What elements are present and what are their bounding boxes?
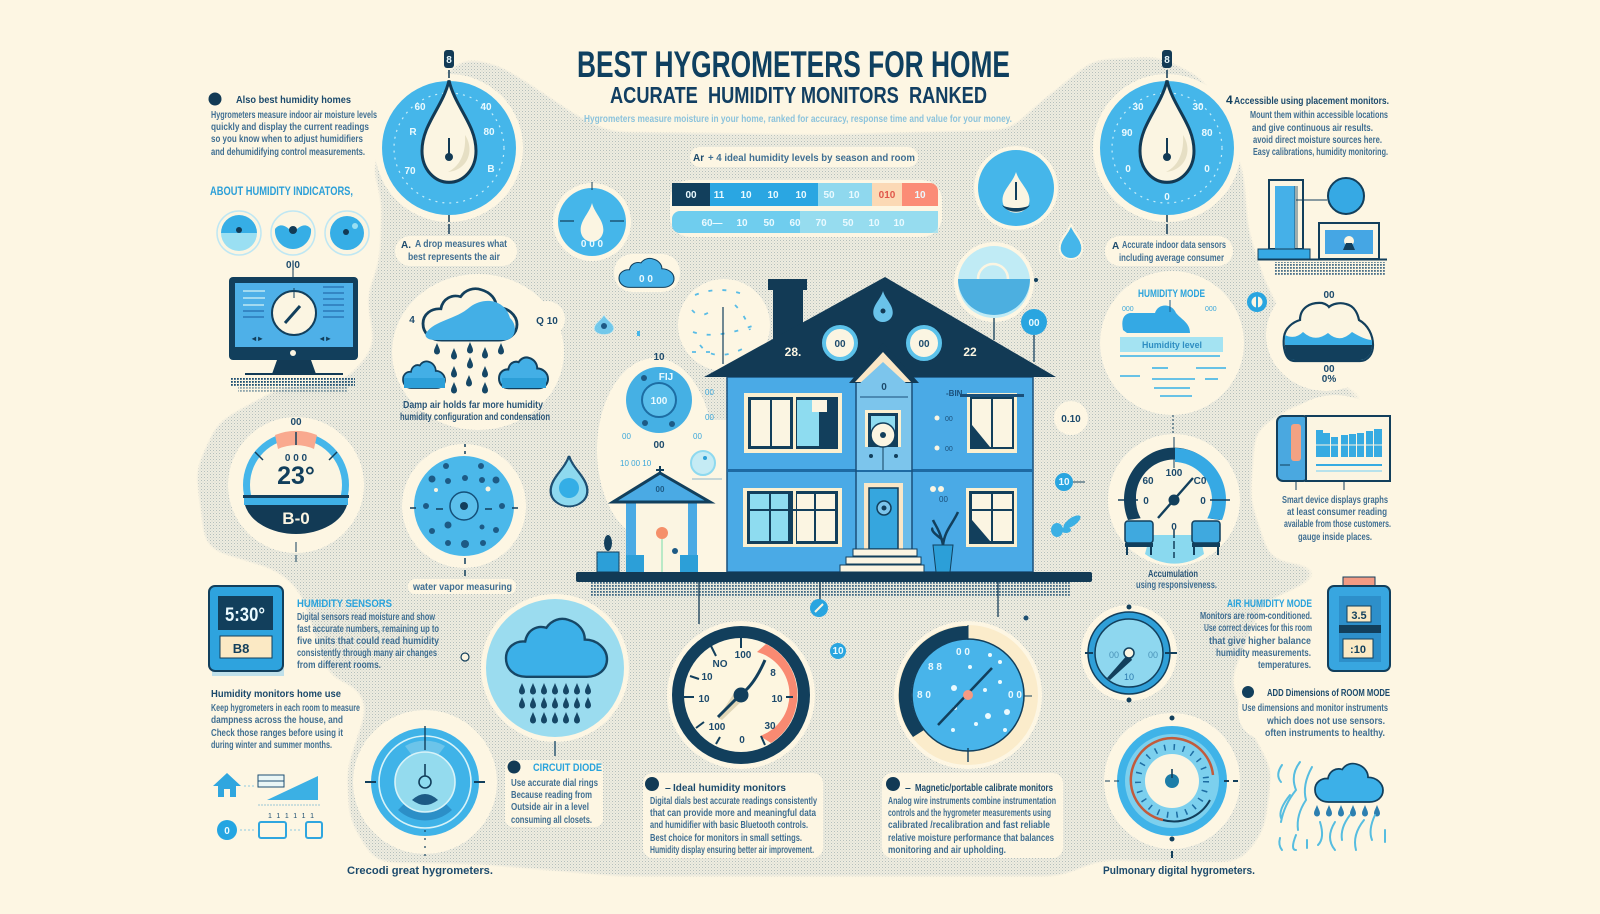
small cloud tag — [619, 258, 674, 287]
icon: cream cloud right: 0% — [1322, 374, 1336, 385]
humidity scale chart: 50 — [823, 190, 835, 201]
text box: monitor center right: Magnetic/portable calibrate monitors — [915, 782, 1053, 794]
text: humidity monitors: dampness across the house, and — [211, 715, 343, 726]
text: top right: 4 — [1226, 93, 1233, 107]
humidity scale chart: 60 — [789, 218, 801, 229]
bar device — [1277, 416, 1390, 490]
house: door — [864, 483, 903, 549]
badge: right — [1247, 292, 1267, 312]
humidity scale chart — [672, 153, 938, 233]
analog gauge center: 8 — [770, 668, 776, 679]
text: top right: Mount them within accessible locations — [1250, 110, 1388, 121]
small cloud tag: 0 0 — [639, 274, 653, 285]
small drop dial: 0 0 0 — [581, 239, 604, 250]
text box: monitor center right — [886, 777, 1056, 856]
small light gauge: 00 — [1109, 650, 1119, 660]
text box: bullet 0: Use accurate dial rings — [511, 778, 598, 789]
caption: dotted dial: water vapor measuring — [412, 582, 512, 593]
humidity scale chart: 10 — [868, 218, 880, 229]
small dial left of house — [620, 352, 714, 468]
droplet dial center right: 8 0 — [917, 690, 931, 701]
left gauge: 23° — [277, 462, 315, 490]
house: gable: 0 — [881, 382, 887, 393]
house: roof — [704, 277, 1056, 377]
text box: monitor center right: Analog wire instruments combine instrumentation — [888, 796, 1056, 807]
small dial left of house: 00 — [622, 432, 631, 441]
icons: home chart flow — [213, 773, 322, 840]
caption: gauge: Accumulation — [1148, 569, 1198, 580]
big drop dial right: 8 — [1164, 55, 1170, 66]
text: air humidity mode — [1200, 598, 1312, 671]
house: roof: 28. — [785, 345, 801, 359]
gauge with chairs — [1118, 437, 1230, 564]
cream bubbles behind elements — [228, 74, 1410, 858]
icon: small drop near right dial — [1060, 224, 1082, 259]
text box: monitor center right: relative moisture performance that balances — [888, 833, 1054, 844]
icon: big drop dial left: 70 — [404, 166, 416, 177]
text: humidity sensors: consistently through many air changes — [297, 648, 437, 659]
badge: numeric: 10 — [832, 646, 844, 657]
analog gauge center: 100 — [709, 722, 726, 733]
humidity scale chart: 11 — [714, 190, 725, 201]
badge: side label: 10 — [1058, 477, 1070, 488]
humidity scale chart: 50 — [842, 218, 854, 229]
icon: cream cloud right: 00 — [1323, 290, 1335, 301]
text: air humidity mode: Use correct devices for this room — [1204, 623, 1312, 634]
house: roof: 22 — [963, 345, 977, 359]
icons: home chart flow: 0 — [224, 826, 230, 837]
small dial left of house: 100 — [651, 396, 668, 407]
caption: right dial — [1112, 240, 1226, 264]
caption: left dial: A. — [401, 240, 411, 251]
device: digital hygrometer right: 3.5 — [1351, 610, 1367, 622]
text: top right: Easy calibrations, humidity monitoring. — [1253, 147, 1388, 158]
house: gable dial — [865, 410, 901, 470]
icon: cream cloud right — [1284, 290, 1373, 385]
analog gauge center: NO — [712, 659, 728, 670]
text box: monitor center right: monitoring and air upholding. — [888, 845, 1006, 856]
humidity scale chart: 60— — [701, 218, 723, 229]
text: air humidity mode: Monitors are room-conditioned. — [1200, 611, 1312, 622]
caption: right dial: including average consumer — [1119, 253, 1224, 264]
small drop right — [978, 150, 1054, 226]
icon: big drop dial left: R — [409, 127, 417, 138]
caption: bottom left: Crecodi great hygrometers. — [347, 865, 493, 877]
humidity scale chart: 70 — [815, 218, 827, 229]
badges center — [810, 599, 828, 617]
panel: top left text: and dehumidifying control measurements. — [211, 147, 365, 158]
analog gauge center: 10 — [771, 694, 783, 705]
text: humidity monitors: during winter and summer months. — [211, 740, 332, 751]
left gauge: 00 — [290, 417, 302, 428]
house: walls — [727, 377, 1033, 572]
bottom right dial — [1105, 716, 1240, 858]
house: wall labels — [930, 389, 963, 504]
icon: big drop dial left: B — [487, 164, 495, 175]
speckled backdrop — [197, 57, 1358, 877]
caption: left dial — [401, 239, 508, 263]
label: Q 10: 0.10 — [1061, 414, 1081, 425]
gauge with chairs: 0 — [1143, 496, 1149, 507]
house: roof: 00 — [918, 339, 930, 350]
icon: big drop dial left — [382, 50, 516, 234]
text: bullet right: Use dimensions and monitor instruments — [1242, 703, 1388, 714]
caption: bar device: available from those customers. — [1284, 519, 1391, 530]
icon: cloud with wind — [1278, 762, 1385, 850]
text: humidity sensors: Digital sensors read moisture and show — [297, 612, 435, 623]
left gauge: 0 0 0 — [285, 453, 308, 464]
text: air humidity mode: temperatures. — [1258, 660, 1311, 671]
analog gauge center: 10 — [701, 672, 713, 683]
icon: dot — [1024, 616, 1028, 620]
text: humidity monitors: Check those ranges before using it — [211, 728, 344, 739]
panel: top left text — [208, 92, 377, 158]
text: top right — [1226, 93, 1389, 158]
house — [576, 277, 1092, 624]
icons: three humidity indicators — [217, 211, 369, 271]
title — [577, 44, 1012, 125]
text box: monitor center right: controls and the hygrometer measurements using — [888, 808, 1051, 819]
text: humidity sensors: HUMIDITY SENSORS — [297, 598, 392, 610]
text: top right: avoid direct moisture sources here. — [1253, 135, 1382, 146]
text box: bullet 0 — [508, 760, 602, 826]
caption: right dial: A — [1112, 241, 1119, 252]
droplet dial center right: 8 8 — [928, 662, 942, 673]
house: chimney — [768, 279, 807, 339]
icon: monitor with dial: ◂ ▸ — [251, 334, 263, 343]
small dial left of house: 10 — [653, 352, 665, 363]
text box: monitor center right: – — [905, 782, 911, 794]
device: digital hygrometer right — [1328, 577, 1390, 671]
analog gauge center: 100 — [735, 650, 752, 661]
subtitle: ACURATE HUMIDITY MONITORS RANKED — [610, 82, 987, 108]
text: bullet right: often instruments to healthy. — [1265, 728, 1385, 739]
caption: bar device: Smart device displays graphs — [1282, 495, 1388, 506]
caption: left dial: best represents the air — [408, 252, 500, 263]
text box: humidity monitors center: Ideal humidity monitors — [673, 782, 786, 794]
gauge with chairs: 60 — [1142, 476, 1154, 487]
rain cloud disc — [486, 599, 624, 756]
text: humidity sensors — [297, 598, 439, 671]
analog gauge center: 30 — [764, 721, 776, 732]
dashed data bubble — [692, 290, 755, 364]
icon: big drop dial left: 8 — [446, 55, 452, 66]
caption: bottom right: Pulmonary digital hygrometers. — [1103, 865, 1255, 877]
caption: right dial: Accurate indoor data sensors — [1122, 240, 1226, 251]
humidity scale chart: 10 — [893, 218, 905, 229]
left gauge: B-0 — [282, 509, 310, 528]
humidity scale chart: 10 — [740, 190, 752, 201]
house: small porch: 00 — [656, 485, 665, 494]
text: bullet right: ADD Dimensions of ROOM MODE — [1267, 687, 1390, 699]
icon: cream cloud right: 00 — [1323, 364, 1335, 375]
droplet dial center right — [898, 625, 1038, 765]
big drop dial right: 0 — [1164, 192, 1170, 203]
humidity scale chart: 00 — [685, 190, 697, 201]
intro line: Hygrometers measure moisture in your home, ranked for accuracy, response time and value for your money. — [584, 114, 1012, 125]
house: steps — [840, 549, 924, 572]
house: ground — [576, 572, 1092, 624]
caption: cloud: Damp air holds far more humidity — [403, 400, 543, 411]
icon: big drop — [551, 456, 587, 506]
icon: small circle — [461, 653, 469, 661]
big drop dial right: 30 — [1192, 102, 1204, 113]
text: humidity sensors: fast accurate numbers, remaining up to — [297, 624, 439, 635]
dotted disc dial — [410, 444, 518, 576]
analog gauge center: 0 — [739, 735, 745, 746]
icons: home chart flow: 1 1 1 1 1 1 — [268, 813, 314, 820]
device: digital hygrometer left: 5:30° — [225, 605, 265, 626]
text box: humidity monitors center: that can provide more and meaningful data — [650, 808, 816, 819]
droplet dial center right: 0 0 — [1008, 690, 1022, 701]
house: wall labels: 00 — [945, 446, 953, 453]
icons: three humidity indicators: 0|0 — [286, 260, 300, 271]
icon: cloud with rain — [403, 289, 548, 394]
small dial left of house: 00 — [705, 413, 714, 422]
badge: 0 0: 00 — [1028, 318, 1040, 329]
analog gauge center: 10 — [698, 694, 710, 705]
title: BEST HYGROMETERS FOR HOME — [577, 44, 1010, 85]
text box: humidity monitors center: Digital dials best accurate readings consistently — [650, 796, 817, 807]
analog gauge center — [672, 626, 810, 764]
caption: cloud — [400, 316, 558, 423]
badge: side label — [1055, 473, 1085, 491]
text: top right: and give continuous air results. — [1252, 123, 1373, 134]
humidity scale chart: 10 — [795, 190, 807, 201]
panel: top left text: so you know when to adjust humidifiers — [211, 134, 363, 145]
gauge with chairs: 0 — [1171, 522, 1177, 533]
left gauge — [241, 417, 351, 562]
panel: top left text: Also best humidity homes — [236, 94, 351, 106]
humidity scale chart: 10 — [848, 190, 860, 201]
icon: big drop dial left: 80 — [483, 127, 495, 138]
device: digital hygrometer left: B8 — [233, 641, 249, 656]
badge: 0 0 — [1021, 309, 1047, 362]
panel: top left text: quickly and display the current readings — [211, 122, 369, 133]
text: humidity monitors: Keep hygrometers in each room to measure — [211, 703, 360, 714]
humidity scale chart: 10 — [736, 218, 748, 229]
text: top right: Accessible using placement monitors. — [1234, 95, 1389, 107]
house: wall labels: 00 — [939, 495, 948, 504]
small dial left of house: 00 — [653, 440, 665, 451]
device: digital hygrometer right: :10 — [1350, 644, 1366, 656]
badge: numeric — [830, 643, 846, 659]
text box: bullet 0: consuming all closets. — [511, 815, 592, 826]
house: lower left window — [743, 488, 842, 547]
text box: bullet 0: Because reading from — [511, 790, 592, 801]
big drop dial right: 80 — [1201, 128, 1213, 139]
text: air humidity mode: that give higher balance — [1209, 636, 1311, 647]
humidity bubble panel: HUMIDITY MODE — [1138, 288, 1205, 300]
small dial left of house: FIJ — [659, 372, 673, 383]
panel: top left text: Hygrometers measure indoor air moisture levels — [211, 110, 377, 121]
text box: humidity monitors center: Humidity display ensuring better air improvement. — [650, 845, 814, 856]
text box: humidity monitors center — [645, 777, 817, 856]
humidity scale chart: 10 — [914, 190, 926, 201]
icon: small gauge bubble — [691, 451, 722, 479]
text: humidity monitors — [211, 688, 360, 751]
bottom left dial — [365, 726, 485, 858]
small light gauge — [1085, 604, 1177, 702]
device: digital hygrometer left — [209, 586, 284, 676]
house: wall labels: 00 — [945, 416, 953, 423]
caption: cloud: Q 10 — [536, 316, 558, 327]
text box: humidity monitors center: and humidifier with basic Bluetooth controls. — [650, 820, 808, 831]
icon: monitor with dial: ◂ ▸ — [319, 334, 331, 343]
sky globe top right of house — [958, 246, 1038, 340]
small drop tag — [594, 315, 640, 336]
text: air humidity mode: humidity measurements. — [1216, 648, 1311, 659]
text: bullet right — [1242, 686, 1390, 739]
small dial left of house: 00 — [705, 388, 714, 397]
caption: gauge — [1136, 569, 1217, 591]
big drop dial right: 0 — [1125, 164, 1131, 175]
gauge with chairs: 0 — [1200, 496, 1206, 507]
text: humidity monitors: Humidity monitors home use — [211, 688, 341, 700]
text box: humidity monitors center: – — [665, 782, 671, 794]
gauge with chairs: 100 — [1166, 468, 1183, 479]
icon: big drop dial left: 40 — [480, 102, 492, 113]
text box: humidity monitors center: Best choice for monitors in small settings. — [650, 833, 802, 844]
heading: about humidity indicators: ABOUT HUMIDITY INDICATORS, — [210, 186, 353, 198]
house: roof: 00 — [834, 339, 846, 350]
text box: monitor center right: calibrated /recalibration and fast reliable — [888, 820, 1050, 831]
small light gauge: 00 — [1148, 650, 1158, 660]
house: plant — [932, 512, 958, 572]
caption: bar device: gauge inside places. — [1298, 532, 1372, 543]
droplet dial center right: 0 0 — [956, 647, 970, 658]
house: small porch — [597, 466, 710, 572]
house: wall labels: -BIN — [946, 389, 963, 398]
small dial left of house: 10 00 10 — [620, 459, 652, 468]
icon: cloud with rain: 4 — [409, 315, 415, 326]
text: air humidity mode: AIR HUMIDITY MODE — [1227, 598, 1312, 610]
humidity scale chart: 10 — [767, 190, 779, 201]
humidity bubble panel: 000 — [1122, 306, 1134, 313]
big drop dial right: 0 — [1204, 164, 1210, 175]
house: lower right window — [966, 488, 1017, 547]
caption: bar device: at least consumer reading — [1287, 507, 1387, 518]
humidity bubble panel: 000 — [1205, 306, 1217, 313]
house: upper right window — [960, 393, 1024, 453]
big drop dial right: 90 — [1121, 128, 1133, 139]
text box: bullet 0: Outside air in a level — [511, 802, 589, 813]
caption: bar device — [1282, 495, 1391, 543]
humidity bubble panel: Humidity level — [1142, 340, 1202, 350]
caption: cloud: humidity configuration and condensation — [400, 412, 550, 423]
humidity scale chart: 50 — [763, 218, 775, 229]
text: humidity sensors: from different rooms. — [297, 660, 381, 671]
text box: bullet 0: CIRCUIT DIODE — [533, 762, 602, 774]
text: humidity sensors: five units that could read humidity — [297, 636, 439, 647]
house: gable — [849, 343, 919, 397]
small dial left of house: 00 — [693, 432, 702, 441]
small drop dial — [558, 182, 626, 256]
humidity scale chart: Ar — [693, 153, 704, 164]
icon: tall meter and screen — [1258, 178, 1387, 276]
text: bullet right: which does not use sensors. — [1266, 716, 1385, 727]
icon: leaf sprig — [1051, 513, 1082, 537]
icon: big drop dial left: 60 — [414, 102, 426, 113]
small light gauge: 10 — [1124, 672, 1134, 682]
big drop dial right — [1100, 50, 1234, 234]
humidity bubble panel — [1120, 288, 1226, 433]
humidity scale chart: + 4 ideal humidity levels by season and room — [708, 153, 915, 164]
icon: monitor with dial — [229, 270, 358, 392]
humidity scale chart: 010 — [879, 190, 896, 201]
gauge with chairs: C0 — [1194, 476, 1207, 487]
big drop dial right: 30 — [1132, 102, 1144, 113]
caption: left dial: A drop measures what — [415, 239, 508, 250]
caption: gauge: using responsiveness. — [1136, 580, 1217, 591]
house: upper left window — [744, 393, 842, 453]
